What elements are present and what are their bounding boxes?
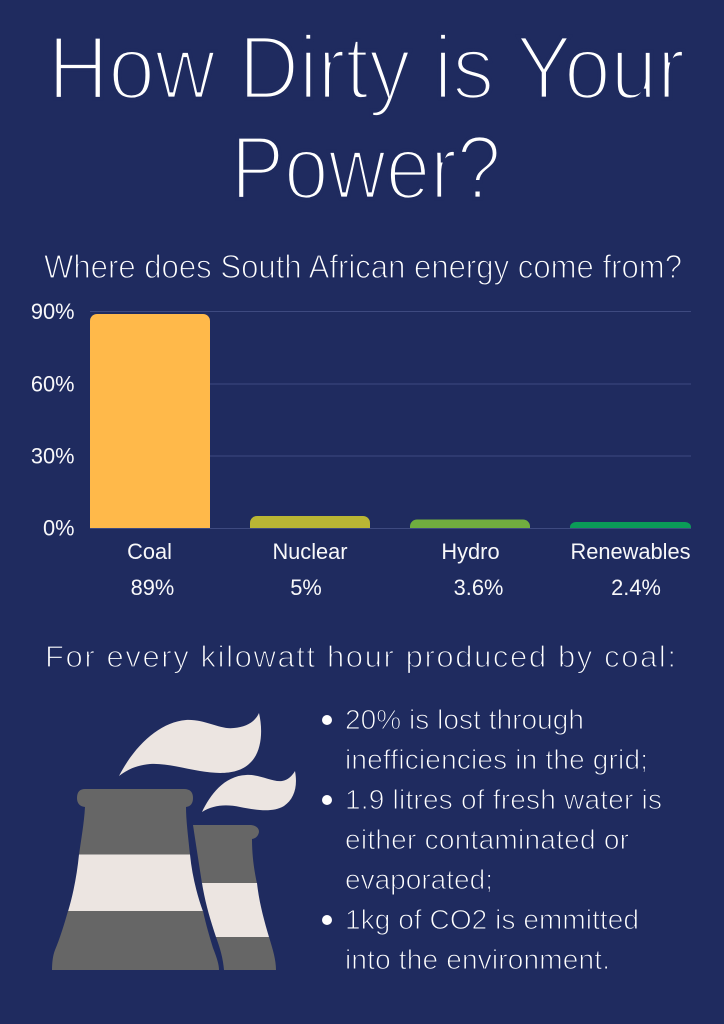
bar: coal [90, 314, 210, 528]
y axis labels: 60% [31, 372, 74, 396]
category labels: Hydro [441, 539, 500, 564]
bullet two: 1.9 litres of fresh water is [345, 784, 662, 815]
bullet three: into the environment. [345, 944, 610, 975]
y axis labels: 0% [43, 516, 74, 540]
value labels: 5% [290, 575, 322, 600]
title: How Dirty is Your [48, 18, 685, 118]
bullet two: either contaminated or [345, 824, 629, 855]
subtitle: energy sources: Where does South African energy come from? [44, 248, 682, 285]
category labels: Nuclear [272, 539, 348, 564]
y axis labels [31, 299, 74, 540]
value labels: 89% [131, 575, 174, 600]
value labels: 2.4% [611, 575, 661, 600]
title [48, 18, 685, 218]
category labels [127, 539, 691, 564]
bullet two [322, 784, 662, 895]
bar: renewables [570, 522, 691, 528]
large smoke plume [119, 713, 261, 776]
bar: hydro [410, 519, 530, 528]
bullet three: 1kg of CO2 is emmitted [345, 904, 639, 935]
icon: cooling towers with smoke [52, 713, 296, 970]
small tower [193, 825, 276, 970]
heading: coal impact: For every kilowatt hour produced by coal: [45, 639, 676, 674]
category labels: Renewables [571, 539, 691, 564]
title: Power? [231, 118, 501, 218]
value labels [131, 575, 661, 600]
y axis labels: 30% [31, 444, 74, 468]
bullet two: evaporated; [345, 864, 493, 895]
bullet list: coal impacts [322, 704, 662, 975]
large tower [52, 789, 219, 970]
bullet three [322, 904, 639, 975]
bullet one: 20% is lost through [345, 704, 584, 735]
category labels: Coal [127, 539, 172, 564]
bullet one [322, 704, 648, 775]
y axis labels: 90% [31, 299, 74, 324]
small smoke plume [202, 771, 296, 812]
bar: nuclear [250, 516, 370, 528]
bar chart: energy mix [31, 299, 691, 600]
bullet one: inefficiencies in the grid; [345, 744, 648, 775]
value labels: 3.6% [454, 575, 503, 600]
